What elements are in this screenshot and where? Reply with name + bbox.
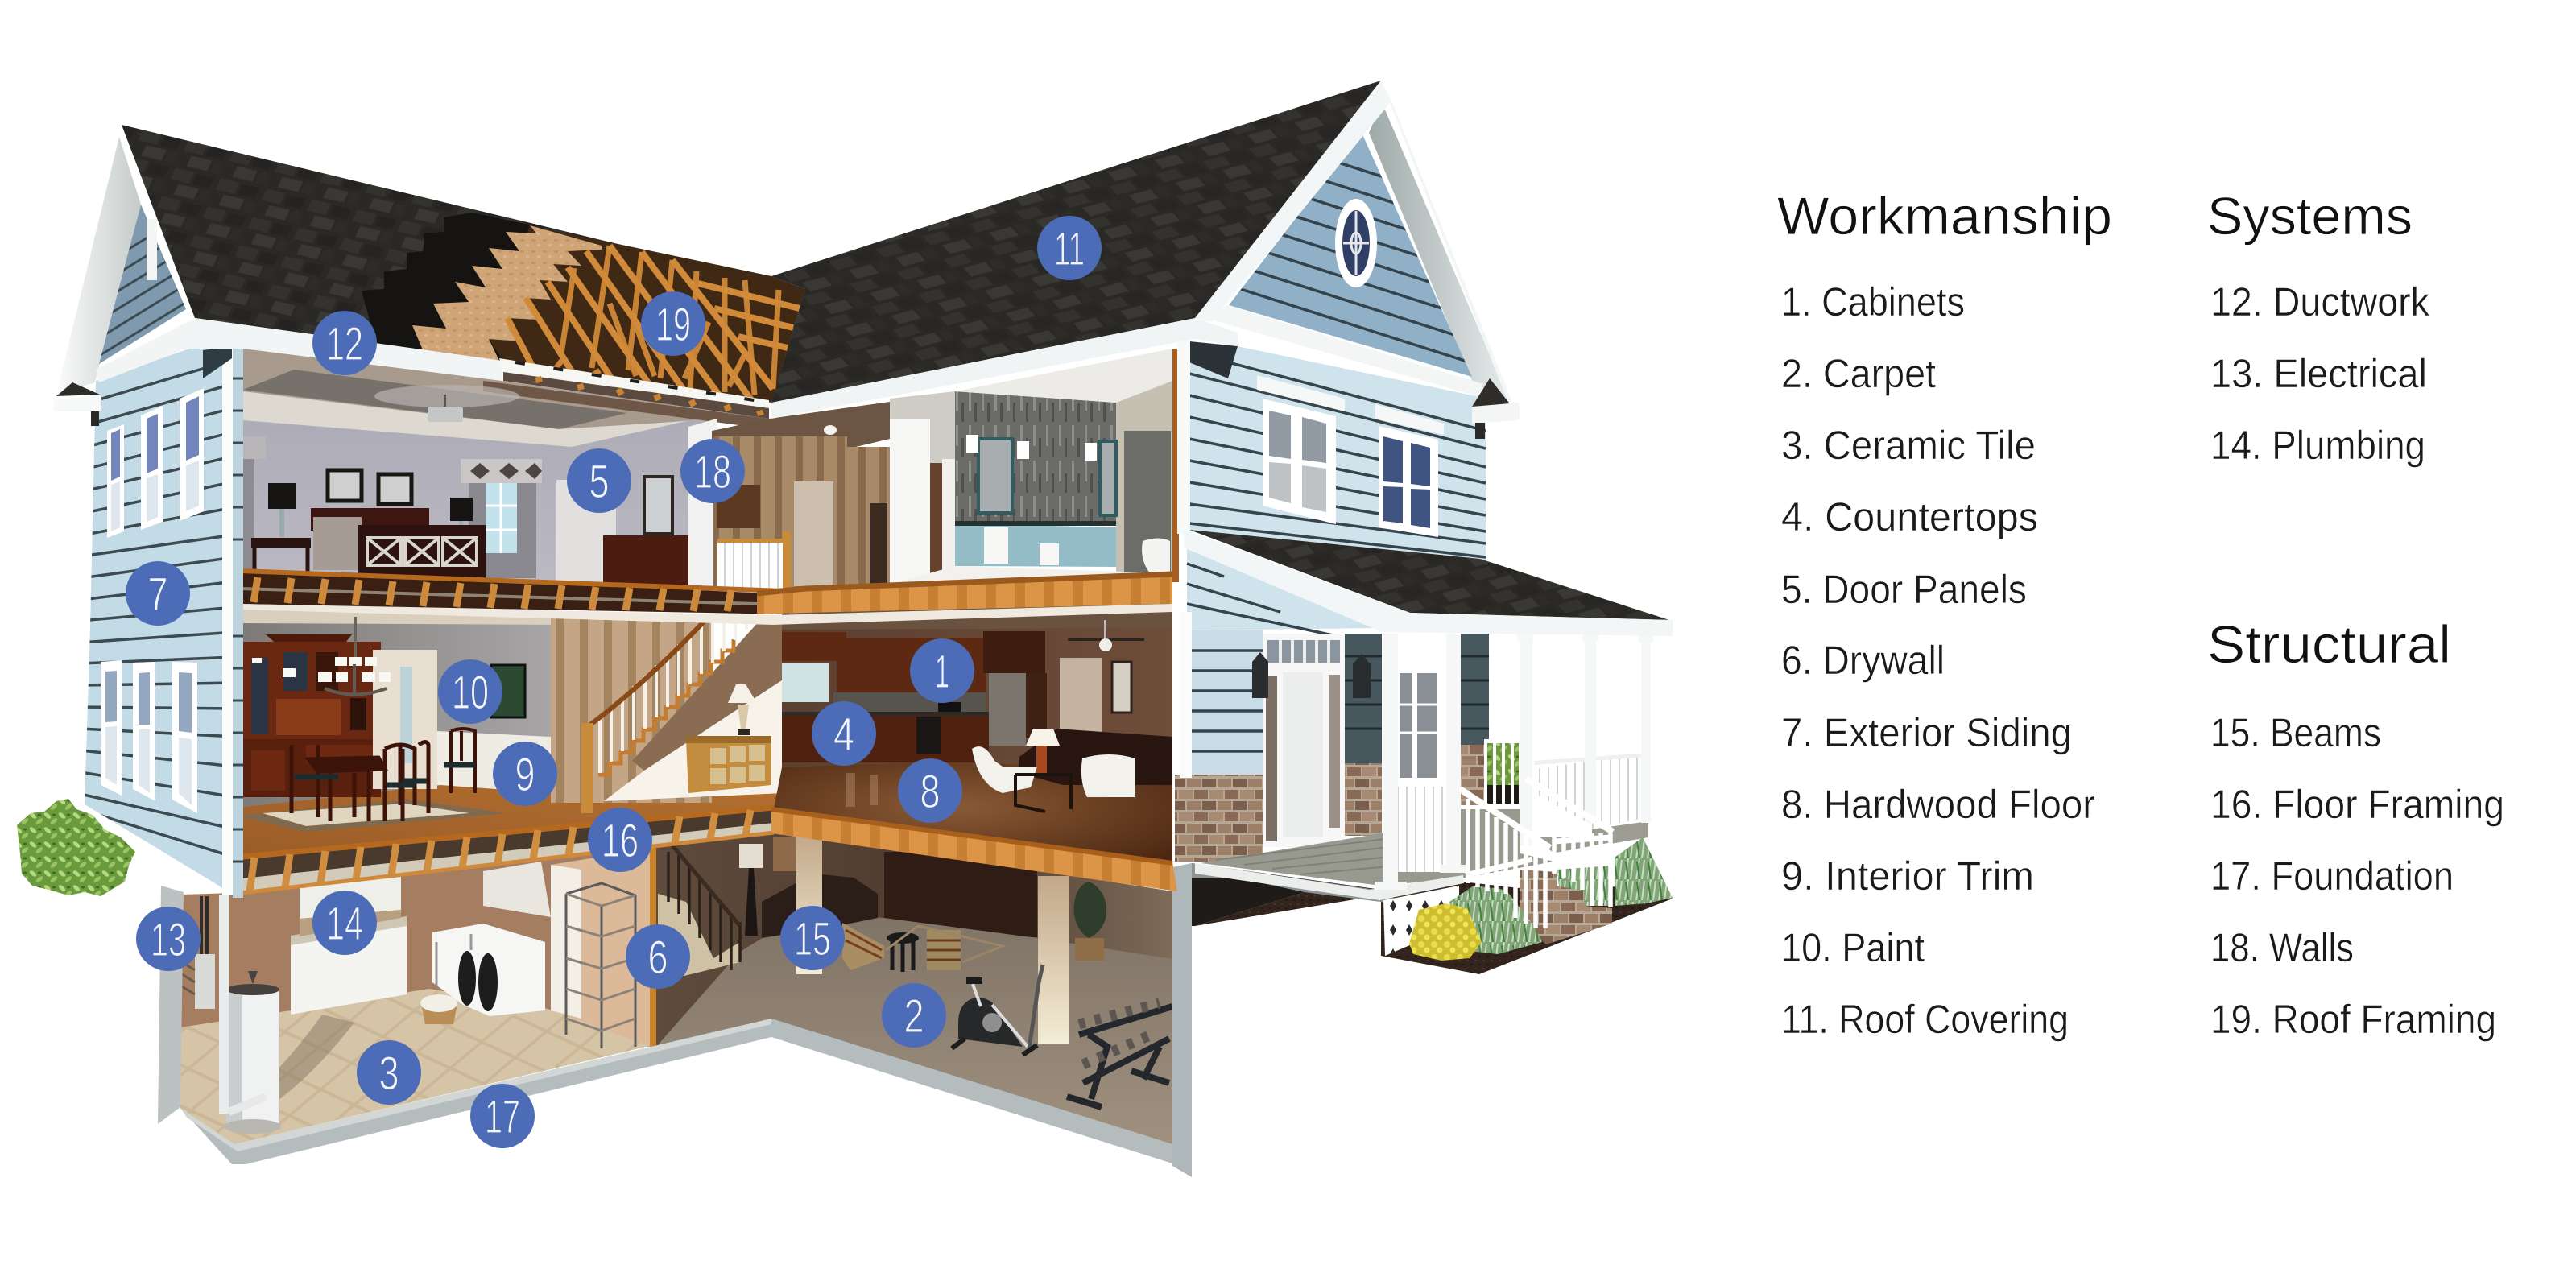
basement: recreation room — [656, 829, 1172, 1144]
upper floor: stair hall — [712, 402, 890, 589]
shadow under soffit — [203, 346, 232, 378]
door — [551, 865, 581, 1019]
marker: 16: 16 — [602, 815, 639, 867]
marker: 15: 15 — [794, 913, 831, 965]
refrigerator — [989, 673, 1026, 746]
list: systems items: 12. Ductwork — [2210, 279, 2430, 324]
shelf unit — [566, 883, 635, 1048]
list: systems items — [2210, 279, 2430, 468]
mirrors and sconces — [966, 435, 1116, 515]
marker: 19 — [641, 291, 705, 356]
list: workmanship items: 4. Countertops — [1781, 494, 2038, 539]
list: workmanship items: 2. Carpet — [1781, 351, 1936, 396]
right gable return — [1472, 378, 1520, 439]
vanity — [955, 521, 1116, 567]
left gable — [54, 137, 195, 426]
gable vent — [147, 219, 157, 280]
sheathing OSB — [412, 225, 602, 362]
washer and sink — [432, 924, 545, 1016]
upper windows — [107, 388, 204, 538]
list: structural items: 15. Beams — [2210, 710, 2381, 755]
left fascia — [175, 318, 769, 419]
marker: 12 — [312, 311, 377, 375]
striped chairs and table — [842, 923, 1003, 972]
marker: 8: 8 — [920, 766, 941, 818]
table lamp — [728, 684, 757, 735]
nightstand — [251, 538, 311, 572]
lower cabinets — [782, 714, 989, 762]
floor lamp — [739, 844, 763, 936]
marker: 10: 10 — [452, 667, 489, 719]
ceiling light — [824, 425, 837, 435]
front grass and yellow shrub — [1409, 886, 1542, 961]
marker: 16 — [588, 808, 652, 872]
tray ceiling — [243, 370, 627, 429]
list: structural items: 18. Walls — [2210, 925, 2354, 970]
laundry basket — [420, 994, 457, 1024]
upper floor: master bedroom — [240, 349, 769, 588]
upper cabinets — [782, 631, 1045, 692]
rake boards — [1195, 81, 1520, 420]
stair rails — [1460, 779, 1613, 928]
brick veneer — [1175, 745, 1485, 862]
kitchen window — [782, 663, 829, 702]
marker: 15 — [780, 906, 845, 970]
balusters — [600, 619, 746, 773]
left exterior wall: siding — [81, 345, 246, 903]
list: structural items — [2210, 710, 2504, 1042]
plant: left bush — [17, 799, 135, 896]
rug — [236, 800, 507, 832]
exercise bike — [952, 965, 1043, 1055]
list: structural items: 17. Foundation — [2210, 853, 2454, 899]
main floor: kitchen and living room — [774, 602, 1172, 863]
marker: 1 — [910, 638, 974, 703]
pictures — [328, 470, 411, 504]
porch back wall — [1345, 634, 1489, 764]
legend column: Workmanship — [1777, 186, 2112, 1042]
list: workmanship items: 5. Door Panels — [1781, 567, 2027, 612]
sofa back — [762, 874, 878, 938]
ceiling light — [428, 395, 463, 422]
picture — [1112, 662, 1131, 713]
illustration: cutaway house — [17, 81, 1673, 1177]
window 1 — [1257, 375, 1345, 524]
right exterior wall: siding — [1189, 341, 1486, 560]
marker: 11 — [1037, 216, 1102, 280]
floor framing between main floor and basement — [234, 808, 1177, 895]
upper cabinet right — [483, 862, 551, 917]
marker: 7: 7 — [148, 568, 167, 621]
porch floor — [1201, 809, 1554, 886]
main floor: stair hall — [551, 616, 782, 813]
list: workmanship items: 8. Hardwood Floor — [1781, 782, 2095, 827]
brick steps — [1520, 870, 1612, 944]
marker: 7 — [126, 561, 190, 626]
side railing with shrub behind — [1484, 739, 1521, 807]
main floor: dining room — [234, 602, 782, 858]
roof trusses — [507, 246, 800, 411]
legend column: Structural — [2207, 614, 2504, 1042]
marker: 3: 3 — [378, 1048, 399, 1100]
marker: 3 — [357, 1040, 421, 1105]
white floor — [886, 566, 1172, 590]
foundation under porch — [1192, 863, 1381, 926]
frieze band — [1212, 305, 1483, 397]
toilet — [1142, 538, 1170, 573]
round window — [1335, 199, 1377, 287]
ceiling fan — [1068, 620, 1144, 651]
right fascia — [771, 318, 1238, 419]
laundry base cabinets — [291, 910, 407, 1015]
marker: 6: 6 — [647, 932, 668, 984]
marker: 9 — [493, 742, 557, 806]
legend column: Systems — [2207, 186, 2430, 468]
bedside lamps — [268, 483, 473, 537]
handrail — [590, 619, 706, 725]
window with curtains — [461, 459, 542, 578]
list: workmanship items — [1781, 279, 2095, 1042]
marker: 9: 9 — [515, 749, 535, 801]
white wall end — [688, 419, 717, 588]
window 2 — [1375, 404, 1444, 537]
list: systems items: 14. Plumbing — [2210, 423, 2425, 468]
staircase treads — [598, 639, 734, 775]
laundry upper cabinets — [300, 871, 401, 919]
railing — [717, 531, 791, 589]
foundation — [158, 863, 1192, 1177]
chandelier — [252, 617, 391, 694]
potted plant — [1074, 882, 1106, 961]
dumbbell rack — [1067, 1003, 1172, 1107]
sofa — [1019, 729, 1172, 785]
marker: 19: 19 — [655, 299, 691, 351]
door — [794, 481, 833, 586]
basement staircase — [658, 845, 740, 976]
list: workmanship items: 1. Cabinets — [1781, 279, 1965, 324]
pillar 1 — [796, 833, 822, 974]
framed art — [773, 837, 797, 871]
marker: 12: 12 — [326, 318, 363, 370]
artwork — [717, 485, 760, 528]
dining table and chairs — [292, 729, 475, 821]
lamp — [1026, 729, 1060, 773]
bedroom door — [556, 480, 616, 585]
list: systems items: 13. Electrical — [2210, 351, 2427, 396]
door — [1060, 658, 1102, 734]
wainscot — [437, 731, 551, 797]
list: workmanship items: 9. Interior Trim — [1781, 853, 2034, 899]
marker: 18 — [680, 439, 745, 503]
electrical panel and conduit — [182, 896, 215, 1009]
basement: laundry room — [180, 832, 774, 1144]
left gable return — [54, 382, 101, 426]
marker: 17: 17 — [485, 1091, 520, 1143]
wall art — [491, 665, 525, 717]
marker: 2: 2 — [903, 990, 924, 1043]
truss cavity — [489, 225, 805, 403]
marker: 4: 4 — [833, 709, 854, 761]
marker: 11: 11 — [1054, 223, 1085, 275]
porch window — [1396, 667, 1444, 786]
right plant mass — [1557, 837, 1673, 906]
columns — [1375, 632, 1653, 890]
crown molding — [243, 391, 686, 447]
marker: 14 — [312, 891, 377, 955]
right gable — [1195, 81, 1520, 439]
marker: 8 — [898, 758, 962, 823]
marker: 13: 13 — [151, 914, 186, 966]
roofing felt — [362, 213, 536, 366]
marker: 2 — [882, 983, 946, 1048]
left roof: shingles — [122, 125, 805, 411]
list: workmanship items: 10. Paint — [1781, 925, 1925, 970]
marker: 4 — [812, 701, 876, 766]
list: workmanship items: 3. Ceramic Tile — [1781, 423, 2036, 468]
marker: 5: 5 — [589, 456, 609, 508]
porch roof — [1184, 530, 1673, 636]
porch — [1175, 530, 1673, 974]
list: workmanship items: 6. Drywall — [1781, 638, 1945, 683]
right roof: shingles — [771, 81, 1381, 403]
marker: 17 — [470, 1084, 535, 1148]
lower windows — [101, 660, 197, 813]
back railing panels — [1534, 753, 1648, 840]
marker: 14: 14 — [326, 898, 363, 950]
bed — [311, 508, 486, 580]
soffit shadow — [1189, 341, 1238, 378]
porch front railing — [1397, 787, 1449, 872]
frieze band — [96, 318, 195, 382]
marker: 18: 18 — [694, 446, 731, 498]
marker: 1: 1 — [935, 646, 949, 698]
pillar 2 — [1038, 876, 1069, 1044]
mulch bed — [1195, 882, 1673, 974]
dresser — [603, 535, 689, 587]
porch slab edge — [1195, 863, 1464, 900]
floor framing between upper and main floor — [240, 570, 1172, 625]
marker: 6 — [626, 924, 690, 989]
list: workmanship items: 7. Exterior Siding — [1781, 710, 2072, 755]
corner post — [1172, 341, 1190, 582]
lower siding wall — [1187, 548, 1381, 775]
front door — [1263, 634, 1345, 847]
upper floor: bathroom — [886, 349, 1172, 590]
white armchairs — [972, 746, 1135, 797]
water heater — [219, 896, 281, 1134]
newel post — [581, 723, 593, 813]
side table — [1015, 775, 1071, 812]
heading: Workmanship: Workmanship — [1777, 186, 2112, 246]
left valance and curtain — [243, 436, 266, 572]
lanterns — [1252, 652, 1371, 698]
heading: Structural: Structural — [2207, 614, 2451, 674]
range — [916, 717, 941, 754]
mirror — [644, 477, 672, 534]
list: workmanship items: 11. Roof Covering — [1781, 997, 2069, 1042]
wood floor glare — [846, 773, 878, 807]
marker: 10 — [438, 659, 502, 724]
heading: Systems: Systems — [2207, 186, 2413, 246]
marker: 13 — [136, 907, 201, 971]
list: structural items: 16. Floor Framing — [2210, 782, 2504, 827]
lattice skirt — [1383, 886, 1459, 956]
list: structural items: 19. Roof Framing — [2210, 997, 2496, 1042]
console and baskets — [686, 736, 771, 793]
curtains and window — [373, 650, 437, 789]
china hutch — [239, 634, 381, 797]
marker: 5 — [567, 448, 631, 513]
backsplash — [833, 692, 986, 717]
